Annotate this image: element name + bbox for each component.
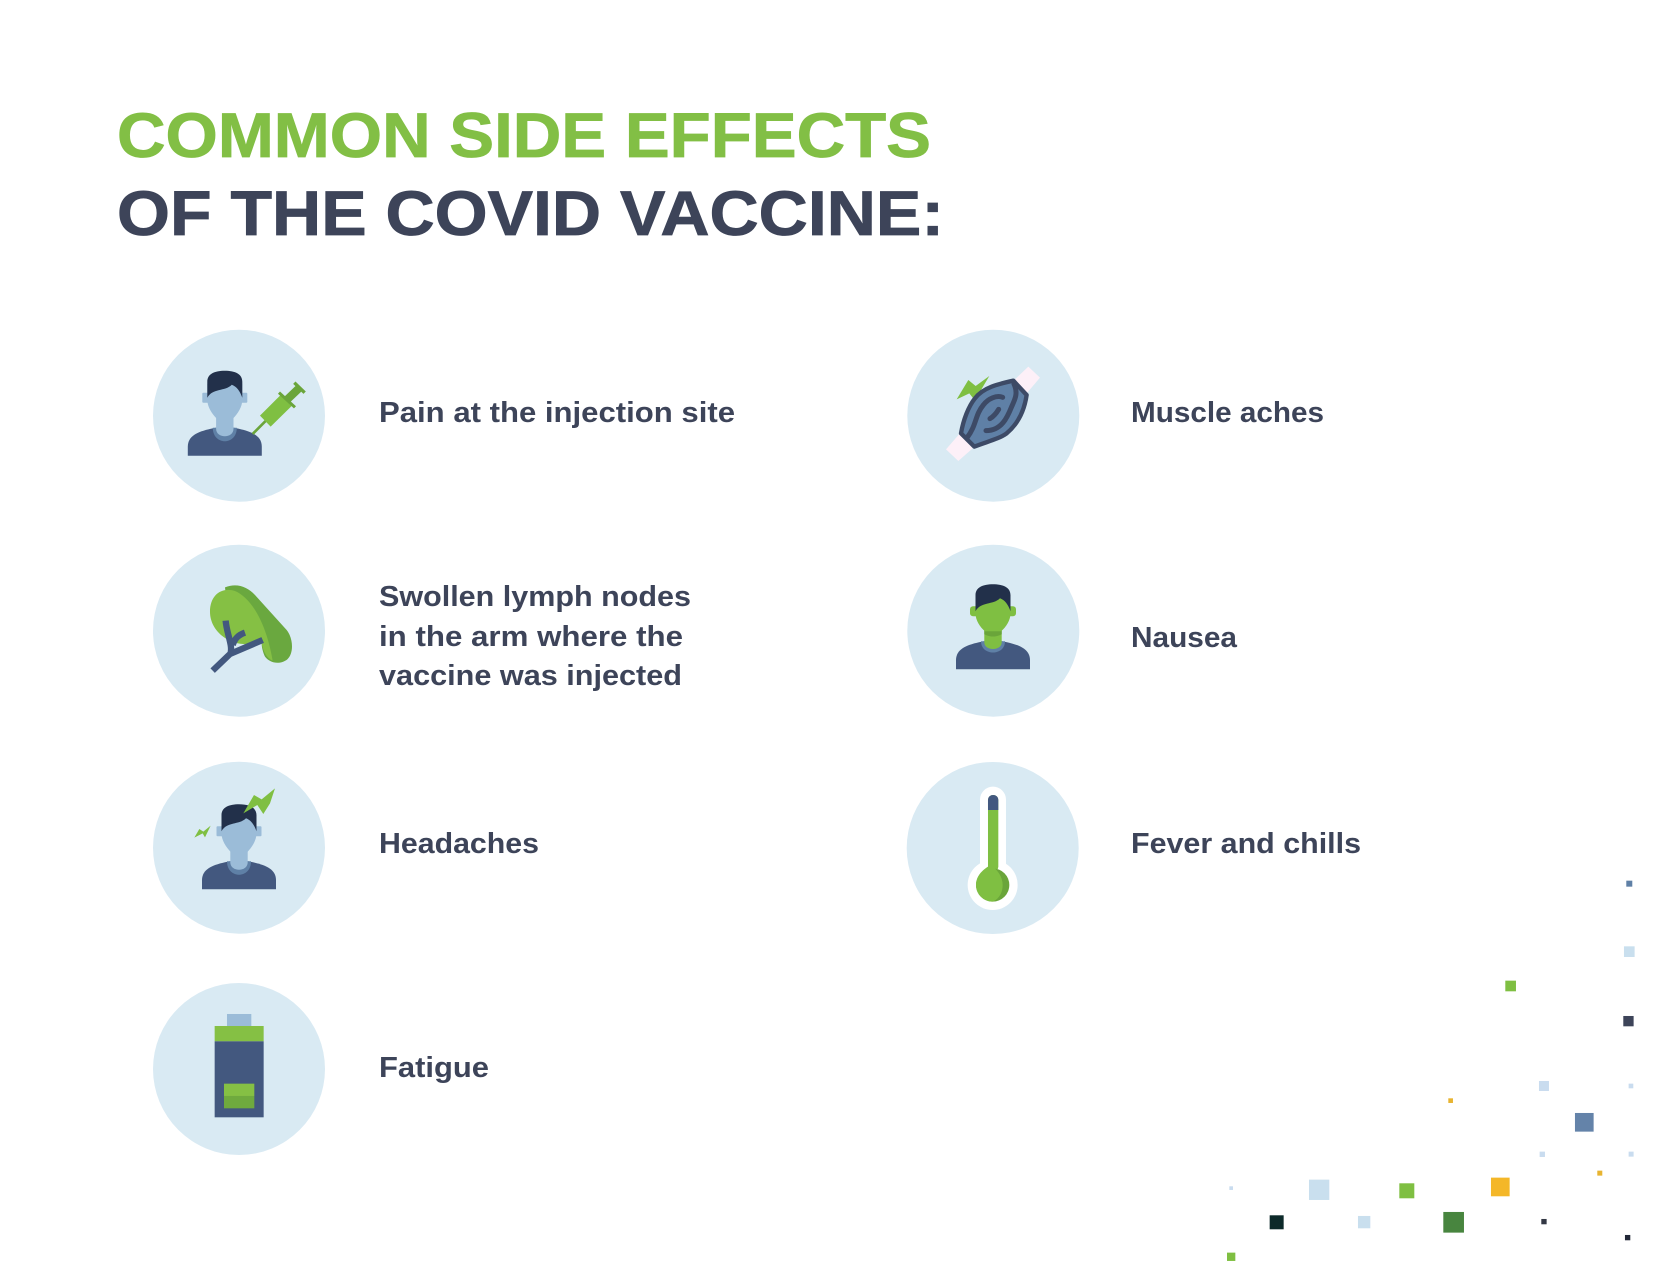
icon circle (153, 983, 325, 1155)
icon circle (153, 762, 325, 934)
decorative confetti squares (1227, 881, 1635, 1261)
icon circle (153, 330, 325, 502)
icon circle (907, 330, 1079, 502)
label: Nausea (1131, 622, 1238, 654)
panel: fatigue (153, 983, 489, 1155)
icon circle (907, 545, 1079, 717)
label (379, 581, 691, 692)
label: vaccine was injected (379, 660, 682, 692)
panel: nausea (907, 545, 1238, 717)
icon: muscle (946, 367, 1040, 461)
panel: pain at the injection site (153, 330, 735, 502)
panel: swollen lymph nodes (153, 545, 691, 717)
icon: lymph node (210, 585, 292, 671)
icon: person with headache (194, 788, 276, 889)
label: Swollen lymph nodes (379, 581, 691, 613)
label: in the arm where the (379, 621, 683, 653)
label: Fatigue (379, 1052, 489, 1084)
label: Pain at the injection site (379, 397, 735, 429)
lightning bolts (194, 788, 275, 838)
label: Fever and chills (1131, 828, 1361, 860)
panel: fever and chills (907, 762, 1361, 934)
icon: person with nausea (956, 584, 1030, 669)
person (202, 804, 276, 889)
icon: person with syringe (188, 371, 305, 456)
label: Muscle aches (1131, 397, 1324, 429)
icon circle (153, 545, 325, 717)
title line 2: OF THE COVID VACCINE: (117, 179, 944, 249)
icon circle (907, 762, 1079, 934)
person (188, 371, 262, 456)
icon: low battery (215, 1014, 264, 1117)
panel: muscle aches (907, 330, 1324, 502)
icon: thermometer (968, 787, 1018, 910)
panel: headaches (153, 762, 539, 934)
title (117, 101, 944, 249)
label: Headaches (379, 828, 539, 860)
syringe (253, 383, 305, 434)
title line 1: COMMON SIDE EFFECTS (117, 101, 931, 171)
